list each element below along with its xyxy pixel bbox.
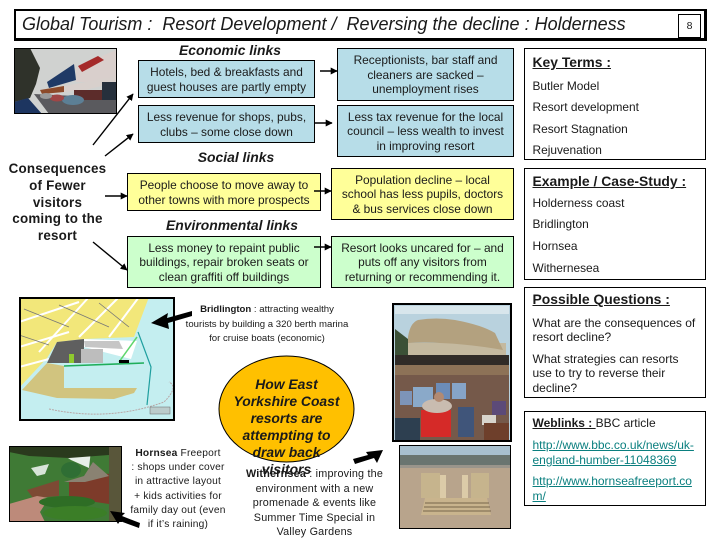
- case study list: Holderness coast: [532, 196, 624, 210]
- links: http://www.bbc.co.uk/news/uk-: [532, 438, 694, 452]
- box: population: Population decline – local: [355, 173, 490, 187]
- case study list: Withernesea: [532, 261, 599, 275]
- box: less tax: council – less wealth to invest: [347, 124, 504, 138]
- caption: Hornsea: : shops under cover: [131, 462, 225, 473]
- caption: Hornsea: if it’s raining): [148, 519, 208, 530]
- photo: sandcastle: [399, 445, 511, 529]
- caption: Withernsea: Withernsea : improving the: [246, 468, 383, 480]
- box: population: & bus services close down: [352, 202, 493, 216]
- callout text: resorts are: [251, 410, 322, 426]
- term list: Resort development: [532, 100, 639, 114]
- photo: Bridlington marina map: [19, 297, 175, 421]
- photo: shopping street: [14, 48, 117, 114]
- box: repaint: clean graffiti off buildings: [159, 270, 289, 284]
- caption: Withernsea: Valley Gardens: [277, 526, 352, 538]
- question list: decline?: [532, 381, 577, 395]
- term list: Butler Model: [532, 78, 599, 92]
- caption: Bridlington: [186, 304, 348, 344]
- links: http://www.hornseafreeport.co: [532, 474, 692, 488]
- box: less tax: [337, 105, 514, 157]
- box: less tax: in improving resort: [377, 139, 474, 153]
- box: people move: [127, 173, 321, 211]
- box: population: [331, 168, 514, 220]
- box: people move: People choose to move away to: [140, 178, 308, 192]
- term list: Rejuvenation: [532, 143, 602, 157]
- panel: example / case-study: [524, 168, 706, 280]
- box: uncared: returning or recommending it.: [345, 270, 500, 284]
- caption: Bridlington: Bridlington : attracting wealthy: [200, 304, 334, 315]
- caption: Bridlington: tourists by building a 320 berth marina: [186, 318, 348, 330]
- heading: economic links: Economic links: [179, 42, 281, 58]
- case study list: Hornsea: [532, 239, 577, 253]
- photo: Hornsea Freeport: [9, 446, 122, 522]
- title bar: Global Tourism : Resort Development / Reversing the decline : Holderness: [22, 14, 626, 34]
- question list: resort decline?: [532, 330, 611, 344]
- caption: Withernsea: environment with a new: [256, 482, 373, 494]
- weblinks heading: Weblinks : BBC article: [532, 416, 656, 430]
- text: consequences: visitors: [33, 195, 82, 210]
- caption: Hornsea: + kids activities for: [134, 491, 222, 502]
- box: uncared: puts off any visitors from: [358, 255, 487, 269]
- text: consequences: coming to the: [12, 211, 103, 226]
- caption: Withernsea: [246, 468, 383, 538]
- box: population: school has less pupils, doctors: [342, 187, 503, 201]
- case study list: [532, 196, 624, 275]
- panel: weblinks: [524, 411, 706, 506]
- caption: Hornsea: family day out (even: [130, 505, 226, 516]
- caption: Hornsea: in attractive layout: [135, 476, 221, 487]
- icon: arrow to Valley Gardens photo: [353, 450, 383, 464]
- heading: social links: Social links: [198, 149, 274, 165]
- page number: [678, 14, 701, 38]
- title bar: [14, 9, 707, 41]
- callout text: [233, 376, 340, 477]
- box: repaint: Less money to repaint public: [148, 241, 300, 255]
- box: uncared: [331, 236, 514, 288]
- links: england-humber-11048369: [532, 453, 676, 467]
- heading: example: Example / Case-Study :: [532, 173, 686, 189]
- question list: What are the consequences of: [532, 316, 695, 330]
- box: revenue: [138, 105, 315, 143]
- question list: What strategies can resorts: [532, 352, 679, 366]
- text: consequences: [9, 161, 106, 243]
- text: consequences: of Fewer: [29, 178, 86, 193]
- box: revenue: Less revenue for shops, pubs,: [147, 110, 306, 124]
- box: receptionists: [337, 48, 514, 101]
- callout: central ellipse: [218, 356, 354, 462]
- panel: key terms: [524, 48, 706, 160]
- question list: [532, 316, 696, 395]
- caption: Withernsea: promenade & events like: [253, 497, 376, 509]
- links: m/: [532, 489, 546, 503]
- term list: Resort Stagnation: [532, 122, 628, 136]
- box: less tax: Less tax revenue for the local: [348, 110, 503, 124]
- callout text: draw back: [253, 444, 320, 460]
- box: uncared: Resort looks uncared for – and: [341, 241, 504, 255]
- panel: possible questions: [524, 287, 706, 398]
- callout text: Yorkshire Coast: [233, 393, 340, 409]
- heading: key terms: Key Terms :: [532, 54, 611, 70]
- caption: Bridlington: for cruise boats (economic): [209, 333, 325, 344]
- box: hotels: guest houses are partly empty: [147, 80, 306, 94]
- callout text: attempting to: [243, 427, 330, 443]
- box: repaint: buildings, repair broken seats or: [139, 255, 309, 269]
- caption: Withernsea: Summer Time Special in: [254, 512, 375, 524]
- box: receptionists: unemployment rises: [372, 82, 479, 96]
- icon: arrow to Hornsea photo: [110, 511, 140, 528]
- caption: Hornsea: Hornsea Freeport: [135, 448, 221, 459]
- term list: [532, 78, 639, 157]
- question list: use to try to reverse their: [532, 366, 665, 380]
- heading: environmental links: Environmental links: [166, 217, 298, 233]
- box: repaint: [127, 236, 321, 288]
- text: consequences: resort: [38, 228, 77, 243]
- case study list: Bridlington: [532, 217, 589, 231]
- box: people move: other towns with more prospects: [138, 192, 310, 206]
- heading: possible questions: Possible Questions :: [532, 291, 670, 307]
- box: hotels: [138, 60, 315, 98]
- box: receptionists: Receptionists, bar staff and: [354, 53, 497, 67]
- links: [532, 438, 694, 503]
- photo: Valley Gardens bandstand: [392, 303, 512, 442]
- callout text: visitors: [262, 461, 311, 477]
- page number: 8: [687, 20, 692, 32]
- callout text: How East: [255, 376, 318, 392]
- box: revenue: clubs – some close down: [160, 124, 293, 138]
- text: consequences: Consequences: [9, 161, 106, 176]
- box: receptionists: cleaners are sacked –: [367, 68, 484, 82]
- icon: arrow to map: [151, 311, 192, 329]
- caption: Hornsea: [130, 448, 226, 530]
- box: hotels: Hotels, bed & breakfasts and: [150, 65, 303, 79]
